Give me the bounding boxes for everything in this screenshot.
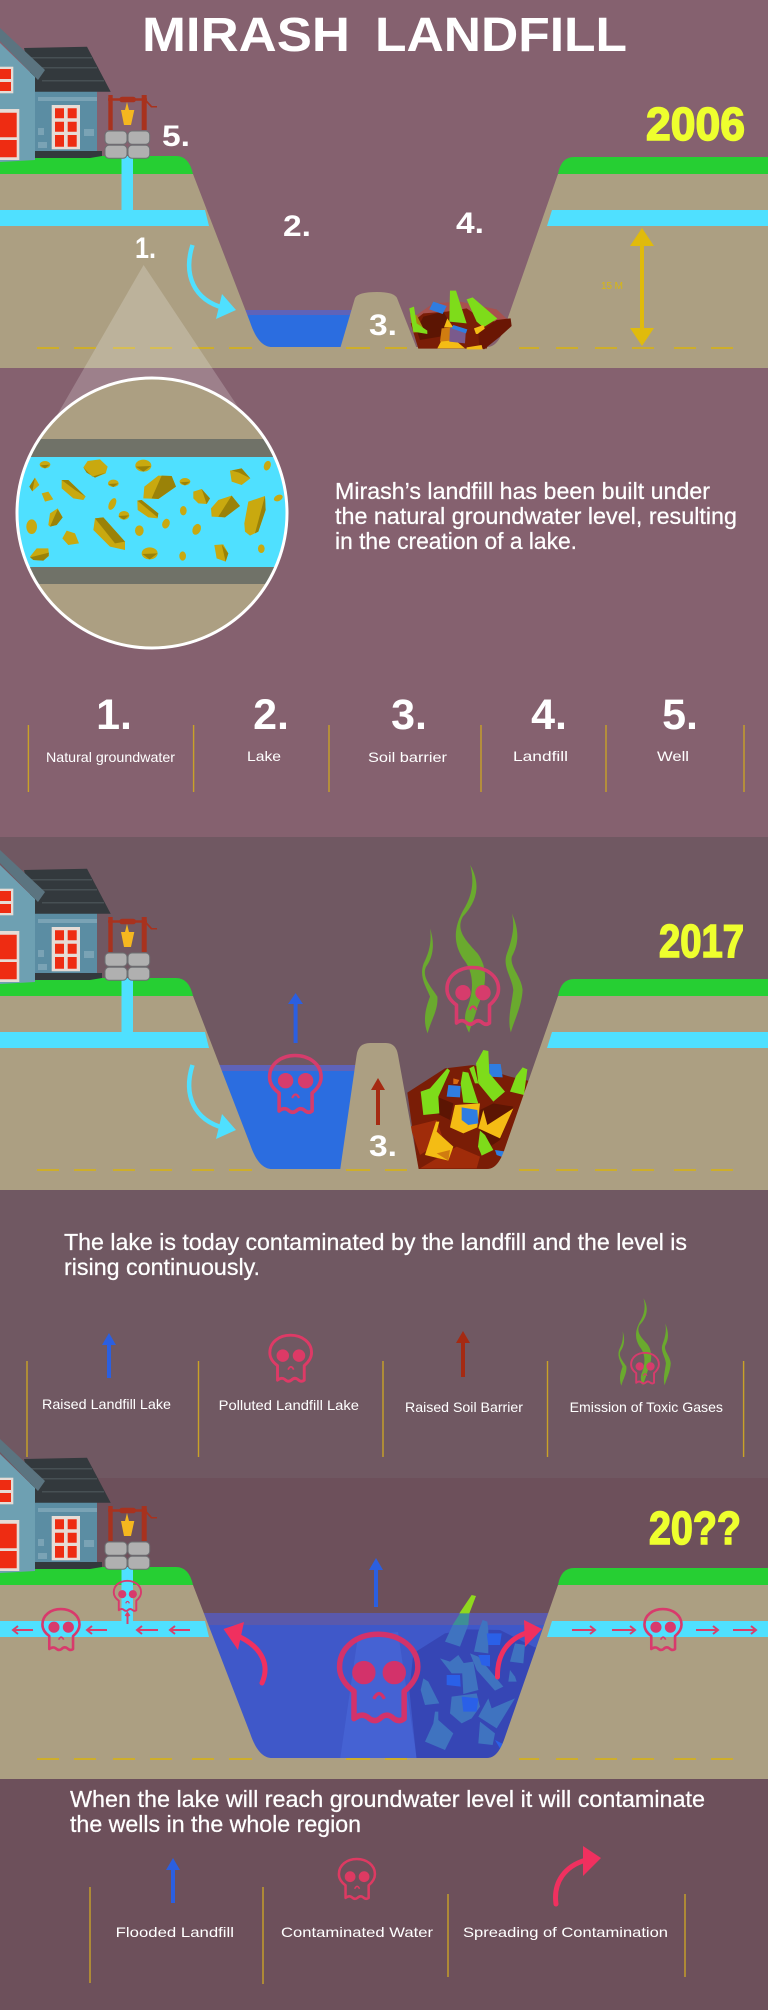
legend item 1 (46, 691, 175, 765)
submerged barrier (340, 1632, 417, 1760)
groundwater layer (0, 156, 768, 226)
legend item: raised barrier (405, 1331, 523, 1415)
submerged landfill (409, 1595, 560, 1760)
text block: 2017 description: The lake is today contaminated by the landfill and the level is (64, 1229, 687, 1255)
legend item: contaminated water (281, 1859, 433, 1940)
text block: 2017 description (64, 1229, 687, 1280)
toxic gas (422, 865, 523, 1033)
legend item 4: 4. (531, 691, 567, 739)
legend item: spreading: Spreading of Contamination (463, 1924, 668, 1940)
skull: lake (270, 1056, 321, 1112)
legend item: toxic gases (570, 1298, 723, 1415)
year: 2017: 2017 (659, 915, 744, 967)
title (142, 9, 627, 62)
marker 3: 3. (369, 1130, 397, 1163)
legend item 5: Well (657, 748, 689, 764)
skull: aquifer right (644, 1609, 682, 1650)
arrow: spread right (497, 1620, 542, 1677)
lake (235, 310, 360, 349)
panel background: 20?? (0, 1478, 768, 2010)
legend item: toxic gases: Emission of Toxic Gases (570, 1399, 723, 1415)
legend item 3 (368, 691, 447, 765)
depth arrow (601, 228, 654, 346)
title: MIRASH (142, 9, 350, 62)
legend item: flooded landfill (116, 1858, 234, 1940)
legend item 4: Landfill (513, 748, 568, 764)
arrows: contamination flow left (13, 1613, 190, 1634)
arrow: spread left (224, 1622, 265, 1683)
landfill waste pile (407, 1050, 540, 1170)
legend item 3: Soil barrier (368, 749, 447, 765)
legend item 1: Natural groundwater (46, 749, 175, 765)
soil barrier (340, 292, 417, 349)
text block: 2017 description: rising continuously. (64, 1254, 260, 1280)
terrain (0, 978, 768, 1190)
panel background: 2006 (0, 0, 768, 837)
year: 20??: 20?? (649, 1502, 741, 1554)
legend item: contaminated water: Contaminated Water (281, 1924, 433, 1940)
text block: 2006 description: the natural groundwater level, resulting (335, 503, 737, 529)
spotlight cone (56, 265, 240, 417)
legend item 2 (247, 691, 289, 764)
arrows: contamination flow right (572, 1626, 756, 1634)
legend item 5 (657, 691, 698, 764)
legend item: raised lake: Raised Landfill Lake (42, 1396, 171, 1412)
legend item: raised lake (42, 1333, 171, 1412)
panel: 20?? scene (0, 1439, 768, 1779)
marker 1: 1. (135, 232, 156, 265)
arrow: rising barrier (371, 1078, 385, 1125)
arrow: rising flood (369, 1558, 383, 1607)
house and well (0, 850, 157, 984)
flooded pit water (195, 1613, 555, 1763)
groundwater layer (0, 1567, 768, 1637)
legend item: polluted lake: Polluted Landfill Lake (219, 1397, 359, 1413)
text block: 2006 description: in the creation of a lake. (335, 528, 577, 554)
legend item 3: 3. (391, 691, 427, 739)
house and well (0, 1439, 157, 1573)
legend item: polluted lake (219, 1335, 359, 1413)
legend item: flooded landfill: Flooded Landfill (116, 1924, 234, 1940)
soil barrier (340, 1043, 419, 1171)
terrain (0, 156, 768, 368)
arrow: groundwater flow (189, 245, 236, 319)
legend item 5: 5. (662, 691, 698, 739)
house and well (0, 28, 157, 162)
skull: flooded lake (340, 1634, 418, 1721)
arrow: groundwater flow (189, 1065, 236, 1139)
legend item 2: Lake (247, 748, 281, 764)
landfill waste pile (409, 291, 512, 349)
marker 5: 5. (162, 120, 190, 153)
legend item 2: 2. (253, 691, 289, 739)
text block: 20?? description (70, 1786, 705, 1837)
contaminated lake (210, 1065, 360, 1171)
magnifier: aquifer close-up (10, 378, 300, 648)
marker 2: 2. (283, 210, 311, 243)
depth dashed line (37, 1758, 733, 1760)
legend item 1: 1. (96, 691, 132, 739)
skull: aquifer left (42, 1609, 80, 1650)
arrow: rising lake (288, 993, 303, 1043)
terrain (0, 1567, 768, 1779)
legend: 2017 key (27, 1298, 744, 1457)
legend item: spreading (463, 1846, 668, 1940)
depth dashed line (37, 347, 733, 349)
depth arrow: 15 M (601, 281, 623, 292)
text block: 20?? description: the wells in the whole region (70, 1811, 361, 1837)
skull: well pipe (114, 1581, 141, 1611)
panel background: 2017 (0, 837, 768, 1478)
text block: 2006 description (335, 478, 737, 554)
panel: 2006 scene (0, 28, 768, 417)
skull: gas (447, 968, 498, 1024)
groundwater layer (0, 978, 768, 1048)
marker 3: 3. (369, 309, 397, 342)
legend: 20?? key (90, 1846, 685, 1984)
legend item: raised barrier: Raised Soil Barrier (405, 1399, 523, 1415)
year: 2006: 2006 (646, 98, 745, 150)
marker 4: 4. (456, 207, 484, 240)
panel: 2017 scene (0, 850, 768, 1190)
legend: 2006 key (28, 691, 744, 792)
text block: 20?? description: When the lake will reach groundwater level it will contaminate (70, 1786, 705, 1812)
text block: 2006 description: Mirash’s landfill has been built under (335, 478, 710, 504)
depth dashed line (37, 1169, 733, 1171)
title: LANDFILL (375, 9, 627, 62)
legend item 4 (513, 691, 568, 764)
